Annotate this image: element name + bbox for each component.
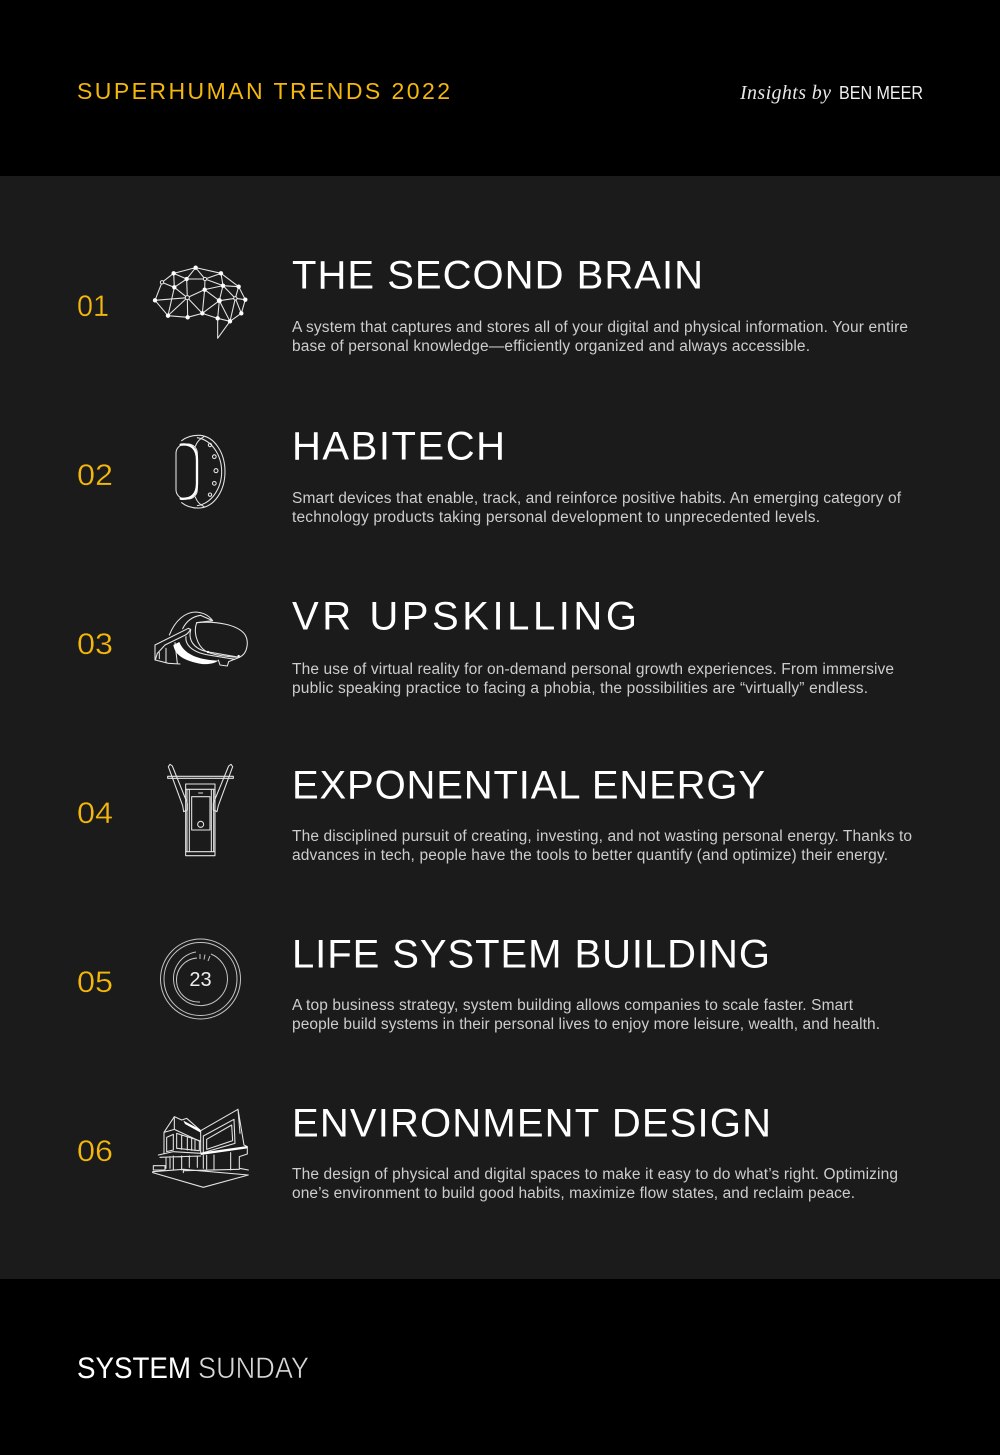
byline: BEN MEER — [839, 83, 923, 103]
number 01: 01 — [77, 290, 109, 323]
number 05: 05 — [77, 966, 113, 999]
heading: HABITECH — [292, 424, 505, 468]
trend 03: vr upskilling — [77, 594, 894, 697]
trend 04: exponential energy — [77, 764, 912, 864]
heading: EXPONENTIAL ENERGY — [292, 764, 765, 808]
panel: main content background — [0, 176, 1000, 1279]
byline — [739, 82, 923, 104]
byline: Insights by — [739, 82, 831, 104]
icon: smart device — [168, 764, 233, 856]
description: public speaking practice to facing a phobia, the possibilities are “virtually” endless. — [292, 680, 868, 697]
description: The design of physical and digital spaces to make it easy to do what’s right. Optimizing — [292, 1166, 898, 1183]
heading: LIFE SYSTEM BUILDING — [292, 932, 770, 976]
description — [292, 828, 912, 864]
description: technology products taking personal development to unprecedented levels. — [292, 509, 820, 526]
description — [292, 1166, 898, 1202]
footer logo: SYSTEM — [77, 1352, 191, 1385]
number 02: 02 — [77, 459, 113, 492]
footer logo: SUNDAY — [198, 1352, 309, 1385]
description: people build systems in their personal lives to enjoy more leisure, wealth, and health. — [292, 1016, 880, 1033]
trend 05: life system building — [77, 932, 880, 1033]
icon: thermostat dial — [160, 939, 240, 1019]
icon: thermostat dial: 23 — [189, 969, 212, 991]
title: SUPERHUMAN TRENDS 2022 — [77, 78, 450, 104]
icon: network brain — [153, 265, 247, 338]
trend 06: environment design — [77, 1102, 898, 1202]
description: A top business strategy, system building allows companies to scale faster. Smart — [292, 997, 854, 1014]
description: Smart devices that enable, track, and reinforce positive habits. An emerging category of — [292, 490, 902, 507]
number 04: 04 — [77, 797, 113, 830]
description: A system that captures and stores all of your digital and physical information. Your entire — [292, 319, 908, 336]
icon: modern house — [153, 1109, 248, 1187]
icon: fitness band — [176, 435, 225, 508]
heading: VR UPSKILLING — [292, 594, 637, 638]
heading: THE SECOND BRAIN — [292, 254, 703, 298]
heading: ENVIRONMENT DESIGN — [292, 1102, 771, 1146]
description: The disciplined pursuit of creating, investing, and not wasting personal energy. Thanks to — [292, 828, 912, 845]
footer logo — [77, 1352, 309, 1385]
number 06: 06 — [77, 1135, 113, 1168]
description: advances in tech, people have the tools to better quantify (and optimize) their energy. — [292, 847, 888, 864]
trend 02: habitech — [77, 424, 902, 526]
description — [292, 997, 880, 1033]
description — [292, 319, 908, 355]
icon: vr headset — [155, 612, 247, 666]
trend 01: the second brain — [77, 254, 908, 355]
description: one’s environment to build good habits, maximize flow states, and reclaim peace. — [292, 1185, 855, 1202]
number 03: 03 — [77, 628, 113, 661]
description — [292, 661, 894, 697]
description: The use of virtual reality for on-demand personal growth experiences. From immersive — [292, 661, 894, 678]
description: base of personal knowledge—efficiently organized and always accessible. — [292, 338, 810, 355]
header — [77, 78, 923, 104]
description — [292, 490, 902, 526]
